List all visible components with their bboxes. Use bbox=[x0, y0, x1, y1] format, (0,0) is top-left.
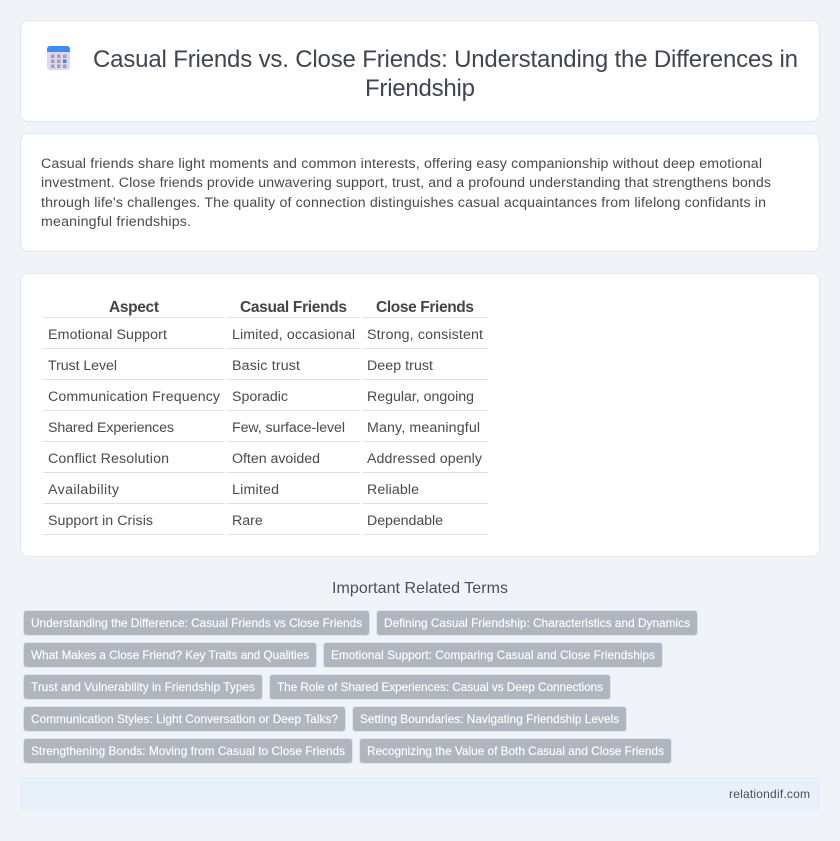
tag: Recognizing the Value of Both Casual and Close Friends bbox=[367, 744, 664, 758]
table header: Aspect bbox=[109, 299, 159, 316]
row: emotional support: Strong, consistent bbox=[367, 327, 483, 343]
title: Friendship bbox=[365, 75, 475, 102]
tag: Emotional Support: Comparing Casual and Close Friendships bbox=[331, 648, 655, 662]
tag bbox=[24, 738, 352, 764]
tag bbox=[24, 674, 262, 700]
row: shared experiences: Many, meaningful bbox=[367, 420, 480, 436]
footer bbox=[20, 777, 820, 811]
tag: Communication Styles: Light Conversation or Deep Talks? bbox=[31, 712, 338, 726]
row: communication frequency: Sporadic bbox=[232, 389, 288, 405]
tag bbox=[352, 706, 626, 732]
tag bbox=[360, 738, 672, 764]
tag: Strengthening Bonds: Moving from Casual to Close Friends bbox=[31, 744, 345, 758]
row: support in crisis: Rare bbox=[232, 513, 263, 529]
tag: Understanding the Difference: Casual Friends vs Close Friends bbox=[31, 616, 362, 630]
row: trust level: Deep trust bbox=[367, 358, 433, 374]
row: support in crisis bbox=[48, 513, 443, 529]
panel: introduction text: through life's challenges. The quality of connection distinguishes casual acquaintances from lifelong confidants in bbox=[41, 195, 766, 211]
row: support in crisis: Dependable bbox=[367, 513, 443, 529]
title: Casual Friends vs. Close Friends: Understanding the Differences in bbox=[93, 46, 798, 73]
row: conflict resolution: Addressed openly bbox=[367, 451, 483, 467]
tag bbox=[376, 610, 698, 636]
row: conflict resolution: Conflict Resolution bbox=[48, 451, 169, 467]
row: emotional support: Limited, occasional bbox=[232, 327, 355, 343]
panel: header bbox=[20, 20, 820, 122]
table header: Casual Friends bbox=[240, 299, 347, 316]
tag: Trust and Vulnerability in Friendship Types bbox=[31, 680, 255, 694]
tag bbox=[24, 642, 316, 668]
row: shared experiences: Shared Experiences bbox=[48, 420, 174, 436]
row: trust level bbox=[48, 358, 433, 374]
row: trust level: Basic trust bbox=[232, 358, 300, 374]
row: availability bbox=[48, 482, 419, 498]
related term tags bbox=[24, 610, 698, 764]
row: shared experiences: Few, surface-level bbox=[232, 420, 345, 436]
icon: calendar bbox=[47, 46, 70, 70]
panel: comparison table bbox=[20, 274, 820, 556]
row: communication frequency: Regular, ongoing bbox=[367, 389, 474, 405]
tag: What Makes a Close Friend? Key Traits and Qualities bbox=[31, 648, 309, 662]
tag bbox=[270, 674, 610, 700]
panel: introduction text: Casual friends share light moments and common interests, offering easy companionship without deep emotional bbox=[41, 156, 762, 172]
table header bbox=[109, 299, 474, 316]
row: support in crisis: Support in Crisis bbox=[48, 513, 153, 529]
row: availability: Availability bbox=[48, 482, 120, 498]
table header: Close Friends bbox=[376, 299, 474, 316]
row: availability: Limited bbox=[232, 482, 279, 498]
row: emotional support: Emotional Support bbox=[48, 327, 167, 343]
title bbox=[93, 46, 798, 102]
row: communication frequency bbox=[48, 389, 474, 405]
tag: Defining Casual Friendship: Characteristics and Dynamics bbox=[384, 616, 690, 630]
heading: important related terms: Important Related Terms bbox=[332, 580, 508, 597]
tag bbox=[24, 706, 346, 732]
panel: introduction text bbox=[20, 134, 820, 252]
row: conflict resolution bbox=[48, 451, 483, 467]
panel: introduction text: investment. Close friends provide unwavering support, trust, and a profound understanding that strengthens bonds bbox=[41, 175, 771, 191]
row: trust level: Trust Level bbox=[48, 358, 117, 374]
footer: relationdif.com bbox=[729, 787, 810, 801]
tag bbox=[24, 610, 370, 636]
tag bbox=[324, 642, 662, 668]
row: emotional support bbox=[48, 327, 483, 343]
tag: The Role of Shared Experiences: Casual vs Deep Connections bbox=[277, 680, 603, 694]
panel: introduction text: meaningful friendships. bbox=[41, 214, 191, 230]
tag: Setting Boundaries: Navigating Friendship Levels bbox=[360, 712, 619, 726]
row: availability: Reliable bbox=[367, 482, 419, 498]
row: conflict resolution: Often avoided bbox=[232, 451, 320, 467]
row: communication frequency: Communication Frequency bbox=[48, 389, 221, 405]
row: shared experiences bbox=[48, 420, 480, 436]
